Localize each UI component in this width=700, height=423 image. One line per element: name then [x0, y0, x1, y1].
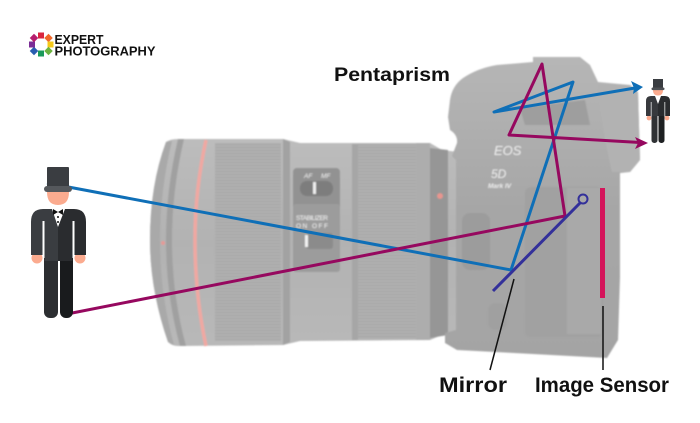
mirror pointer — [490, 279, 514, 370]
camera model text: Mark IV — [488, 183, 512, 190]
lens switch panel: MF — [321, 173, 331, 180]
label: Mirror: Mirror — [439, 374, 507, 397]
logo text — [54, 32, 156, 58]
icon: colour ring — [29, 32, 54, 56]
lens red ring — [195, 140, 206, 346]
light path: blue — [47, 82, 635, 270]
figure: man in top hat (subject) — [31, 167, 86, 318]
lens switch panel: STABILIZER — [296, 215, 328, 222]
arrowhead: blue — [631, 81, 643, 94]
lens release button — [462, 213, 490, 270]
image sensor pointer — [602, 306, 604, 370]
lens switch panel: AF — [303, 173, 313, 180]
camera body — [437, 57, 640, 358]
logo text: EXPERT — [54, 32, 104, 47]
figure: man in top hat (viewer) — [646, 79, 670, 143]
light path: purple — [62, 64, 640, 315]
lens switch panel — [293, 168, 340, 272]
image sensor — [600, 188, 605, 298]
camera model text: 5D — [491, 167, 507, 181]
camera model text: EOS — [494, 143, 522, 158]
camera model text — [488, 143, 522, 190]
door panel — [525, 187, 603, 337]
camera lens — [150, 139, 458, 346]
label: Pentaprism: Pentaprism — [334, 64, 450, 86]
lens switch panel: ON OFF — [296, 223, 328, 230]
mirror — [493, 194, 588, 291]
label: Image Sensor: Image Sensor — [535, 374, 669, 397]
logo text: PHOTOGRAPHY — [54, 44, 156, 58]
logo: Expert Photography — [29, 32, 156, 58]
arrowhead: purple — [635, 137, 648, 149]
